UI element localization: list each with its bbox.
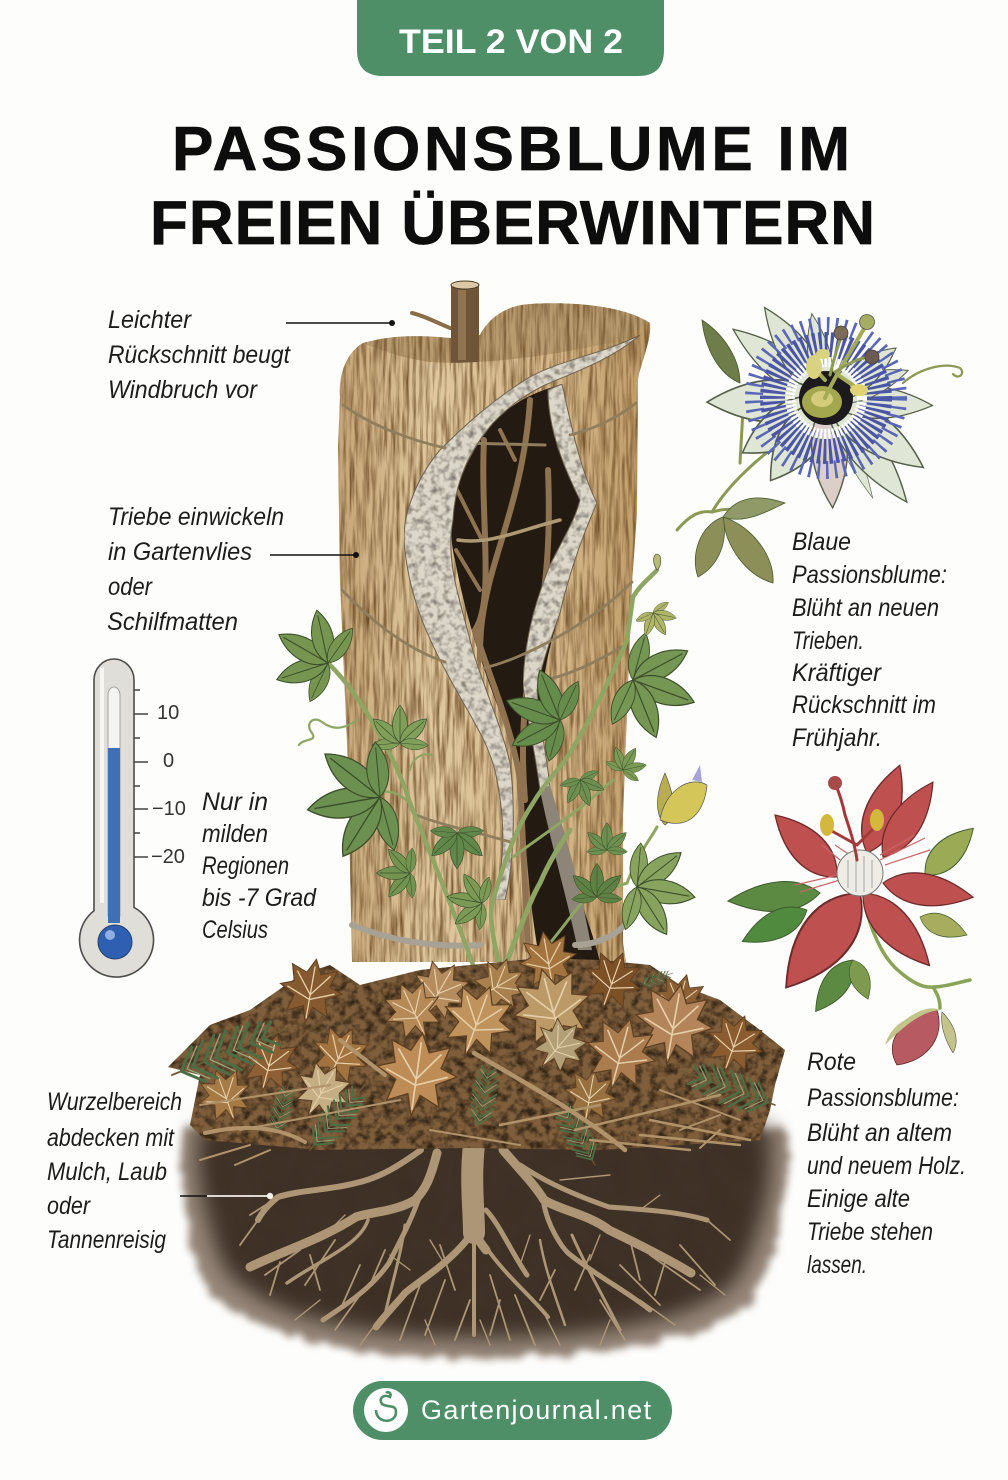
icon: thermometer: −10 xyxy=(152,798,186,820)
filaments xyxy=(795,835,930,892)
stems and tendril xyxy=(677,366,962,530)
callout: wrap shoots: oder xyxy=(108,573,153,601)
icon: thermometer xyxy=(80,659,186,977)
title: PASSIONSBLUME IM xyxy=(172,115,850,184)
callout: root zone: oder xyxy=(47,1192,91,1220)
stamens xyxy=(830,783,877,860)
red bud xyxy=(892,1010,939,1065)
text: red passion flower: und neuem Holz. xyxy=(807,1152,966,1180)
exposed shoots xyxy=(456,400,560,950)
text: blue passion flower: Blüht an neuen xyxy=(792,594,939,622)
petals xyxy=(763,759,976,1003)
callout: root zone: Tannenreisig xyxy=(47,1226,166,1254)
callout: temperature: milden xyxy=(202,820,268,848)
tie strings xyxy=(342,403,636,946)
callout: root zone: Wurzelbereich xyxy=(47,1088,182,1116)
callout: wrap shoots xyxy=(107,503,359,636)
callout: root zone: Mulch, Laub xyxy=(47,1158,167,1186)
callout: root zone xyxy=(47,1088,273,1254)
flap edges xyxy=(404,335,640,900)
footer badge: Gartenjournal.net xyxy=(421,1395,651,1425)
text: blue passion flower: Passionsblume: xyxy=(792,561,947,589)
banner: part label xyxy=(357,0,664,76)
callout: pruning: Rückschnitt beugt xyxy=(108,341,291,369)
central stake xyxy=(412,281,479,367)
stems xyxy=(867,913,970,1008)
wrap body xyxy=(338,323,650,962)
text: blue passion flower: Trieben. xyxy=(792,627,864,655)
callout: wrap shoots: Schilfmatten xyxy=(107,608,238,636)
illustration: reed wrap around the plant xyxy=(338,281,650,962)
roots xyxy=(240,1145,730,1345)
petals xyxy=(707,299,934,512)
flower centre and stamens xyxy=(802,386,842,418)
icon: logo xyxy=(364,1388,408,1432)
white corona xyxy=(837,850,883,896)
callout: pruning: Windbruch vor xyxy=(108,376,259,404)
text: blue passion flower xyxy=(792,528,947,752)
banner: part label: TEIL 2 VON 2 xyxy=(399,23,623,61)
text: red passion flower: Einige alte xyxy=(807,1185,910,1213)
dry leaves xyxy=(192,927,772,1130)
illustration: blue passion flower xyxy=(677,299,962,583)
callout: temperature: Celsius xyxy=(202,916,268,944)
title xyxy=(150,115,875,258)
green leaves xyxy=(727,818,983,1019)
text: red passion flower: Passionsblume: xyxy=(807,1084,959,1112)
illustration: soil and roots xyxy=(182,1125,787,1358)
callout: temperature: Nur in xyxy=(202,788,268,816)
text: red passion flower: lassen. xyxy=(807,1251,867,1279)
palmate leaves xyxy=(255,594,362,710)
text: red passion flower: Blüht an altem xyxy=(807,1119,952,1147)
callout: temperature xyxy=(202,788,317,944)
callout: wrap shoots: Triebe einwickeln xyxy=(108,503,284,531)
soil mound xyxy=(182,1125,787,1358)
title: FREIEN ÜBERWINTERN xyxy=(150,189,875,258)
callout: temperature: Regionen xyxy=(202,852,289,880)
stems xyxy=(299,570,657,965)
callout: root zone: abdecken mit xyxy=(47,1124,175,1152)
flower leaves xyxy=(695,320,785,583)
twigs xyxy=(200,1040,750,1165)
text: blue passion flower: Kräftiger xyxy=(792,659,883,687)
icon: thermometer: −20 xyxy=(151,846,185,868)
footer badge xyxy=(353,1381,672,1440)
text: red passion flower: Triebe stehen xyxy=(807,1218,933,1246)
illustration: red passion flower xyxy=(727,759,983,1065)
text: red passion flower: Rote xyxy=(807,1048,856,1076)
callout: pruning xyxy=(108,306,395,404)
bud: yellow xyxy=(654,554,707,825)
illustration: mulch layer xyxy=(164,927,785,1171)
icon: thermometer: 0 xyxy=(163,750,174,772)
text: blue passion flower: Rückschnitt im xyxy=(792,691,936,719)
opening xyxy=(451,385,600,962)
callout: pruning: Leichter xyxy=(108,306,193,334)
icon: thermometer: 10 xyxy=(157,702,179,724)
fir sprigs xyxy=(164,1008,296,1095)
text: red passion flower xyxy=(807,1048,966,1279)
illustration: green vine with leaves xyxy=(255,554,713,965)
text: blue passion flower: Blaue xyxy=(792,528,851,556)
back of the wrap xyxy=(363,303,650,367)
corona filaments xyxy=(754,326,898,470)
callout: wrap shoots: in Gartenvlies xyxy=(108,538,252,566)
callout: temperature: bis -7 Grad xyxy=(202,884,317,912)
text: blue passion flower: Frühjahr. xyxy=(792,724,882,752)
